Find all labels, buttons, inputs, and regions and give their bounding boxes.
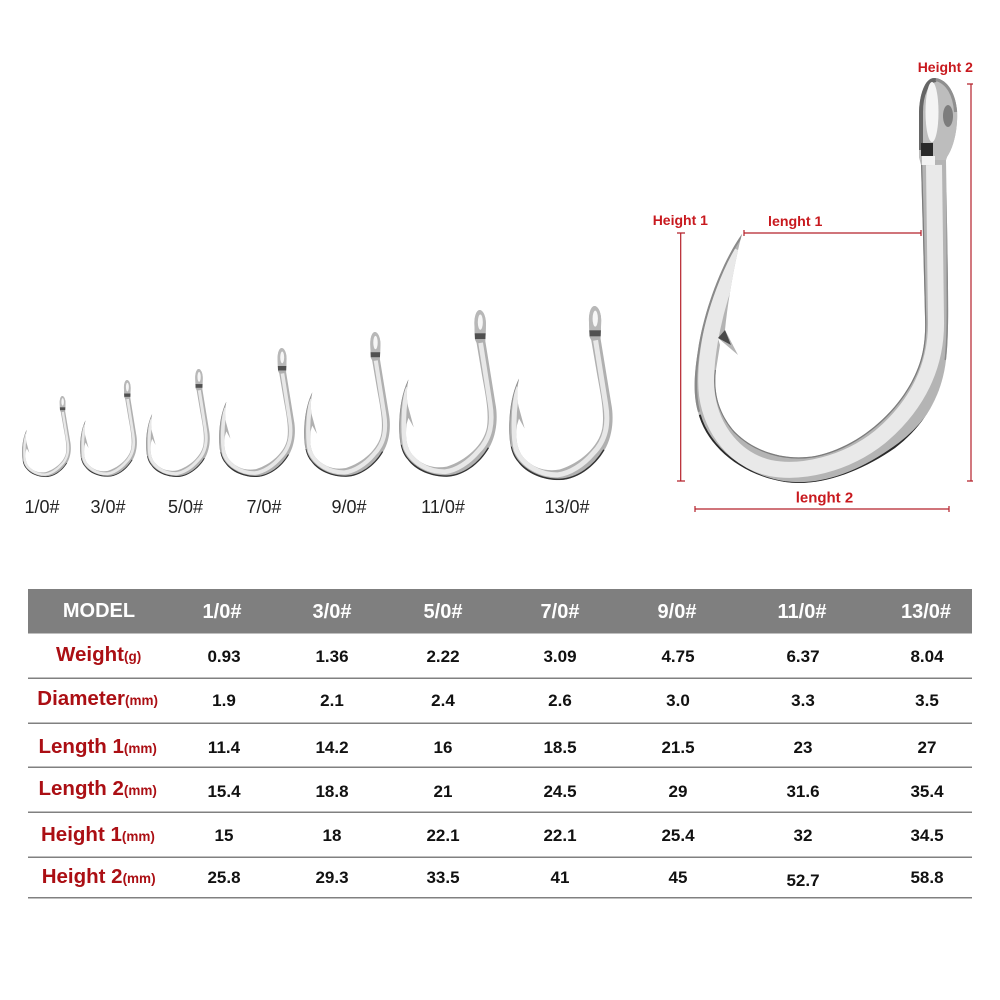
row: weight: 0.93: [207, 647, 241, 666]
dimension: lenght 1: lenght 1: [768, 214, 822, 230]
hook size labels: [24, 497, 590, 517]
row: weight: [56, 643, 944, 666]
table header: 13/0#: [901, 601, 951, 623]
row: length 2: 24.5: [543, 782, 577, 801]
row: height 2: 41: [551, 868, 569, 887]
table header: 3/0#: [313, 601, 351, 623]
row: length 2: Length 2(mm): [38, 777, 157, 800]
dimension: lenght 2: lenght 2: [796, 490, 853, 507]
row: diameter: 3.0: [666, 691, 690, 710]
hook size labels: 1/0#: [24, 497, 60, 517]
hook size labels: 13/0#: [544, 497, 590, 517]
large dimensioned hook: [694, 78, 958, 483]
row: diameter: 2.6: [548, 691, 572, 710]
row: length 1: 18.5: [543, 738, 577, 757]
row: length 1: 21.5: [661, 738, 695, 757]
row: weight: 8.04: [910, 647, 944, 666]
hook size labels: 9/0#: [331, 497, 367, 517]
hook size labels: 3/0#: [90, 497, 126, 517]
row: height 1: [41, 823, 944, 846]
row: length 1: 11.4: [208, 738, 241, 757]
row: height 2: 33.5: [426, 868, 460, 887]
table header: 9/0#: [658, 601, 696, 623]
row: height 1: 15: [215, 826, 233, 845]
row: length 1: 23: [794, 738, 812, 757]
row: length 1: 16: [434, 738, 452, 757]
row: height 1: 18: [323, 826, 341, 845]
row: weight: 4.75: [661, 647, 695, 666]
row: length 1: [38, 735, 936, 758]
row: length 2: 21: [434, 782, 452, 801]
row: length 2: 15.4: [207, 782, 241, 801]
row: length 2: 29: [669, 782, 687, 801]
row: height 2: 29.3: [315, 868, 349, 887]
row: height 2: 52.7: [786, 871, 820, 890]
row: diameter: 2.1: [320, 691, 344, 710]
row: length 2: 35.4: [910, 782, 944, 801]
dimension: height 1: [653, 212, 708, 481]
row: diameter: 3.5: [915, 691, 939, 710]
row: height 2: Height 2(mm): [42, 865, 156, 888]
row: height 1: Height 1(mm): [41, 823, 155, 846]
dimension: height 2: Height 2: [918, 59, 973, 75]
specification table: [28, 589, 972, 898]
hook 11/0: [396, 308, 500, 480]
row: height 1: 34.5: [910, 826, 944, 845]
hook 7/0: [217, 346, 298, 479]
row: length 2: 18.8: [315, 782, 349, 801]
row: length 1: Length 1(mm): [38, 735, 157, 758]
row: length 2: 31.6: [786, 782, 820, 801]
row: diameter: Diameter(mm): [37, 687, 158, 710]
row: height 1: 32: [794, 826, 812, 845]
row: weight: Weight(g): [56, 643, 141, 666]
row: diameter: [37, 687, 939, 710]
hook size labels: 5/0#: [168, 497, 203, 517]
row: height 1: 22.1: [426, 826, 460, 845]
hook 13/0: [506, 304, 616, 483]
row: height 1: 25.4: [661, 826, 695, 845]
table header: 1/0#: [203, 601, 241, 623]
hook size labels: 11/0#: [421, 497, 465, 517]
row: length 1: 14.2: [315, 738, 349, 757]
hook size labels: 7/0#: [246, 497, 282, 517]
row: weight: 3.09: [543, 647, 577, 666]
eye ring: [919, 78, 958, 160]
hook 1/0: [21, 395, 73, 479]
table header: 7/0#: [541, 601, 579, 623]
row: height 2: 25.8: [207, 868, 241, 887]
table header: 5/0#: [424, 601, 462, 623]
dimension: height 2: [918, 59, 973, 481]
row: height 1: 22.1: [543, 826, 577, 845]
dimension: height 1: Height 1: [653, 212, 708, 228]
dimension: lenght 2: [695, 490, 949, 512]
row: height 2: 45: [669, 868, 687, 887]
table header: 11/0#: [778, 601, 826, 623]
row: length 1: 27: [918, 738, 936, 757]
row: weight: 2.22: [426, 647, 460, 666]
row: weight: 1.36: [315, 647, 349, 666]
row: diameter: 2.4: [431, 691, 455, 710]
hook 9/0: [302, 330, 393, 480]
row: weight: 6.37: [786, 647, 820, 666]
row: length 2: [38, 777, 944, 801]
row: diameter: 3.3: [791, 691, 815, 710]
hook 5/0: [144, 368, 212, 479]
hook 3/0: [79, 379, 139, 479]
row: diameter: 1.9: [212, 691, 236, 710]
dimension: lenght 1: [744, 214, 921, 236]
row: height 2: 58.8: [910, 868, 944, 887]
table header: [28, 589, 972, 634]
row: height 2: [42, 865, 944, 890]
table header: MODEL: [63, 600, 135, 622]
eye hole: [943, 105, 953, 127]
row of seven hooks by size: [21, 304, 616, 483]
